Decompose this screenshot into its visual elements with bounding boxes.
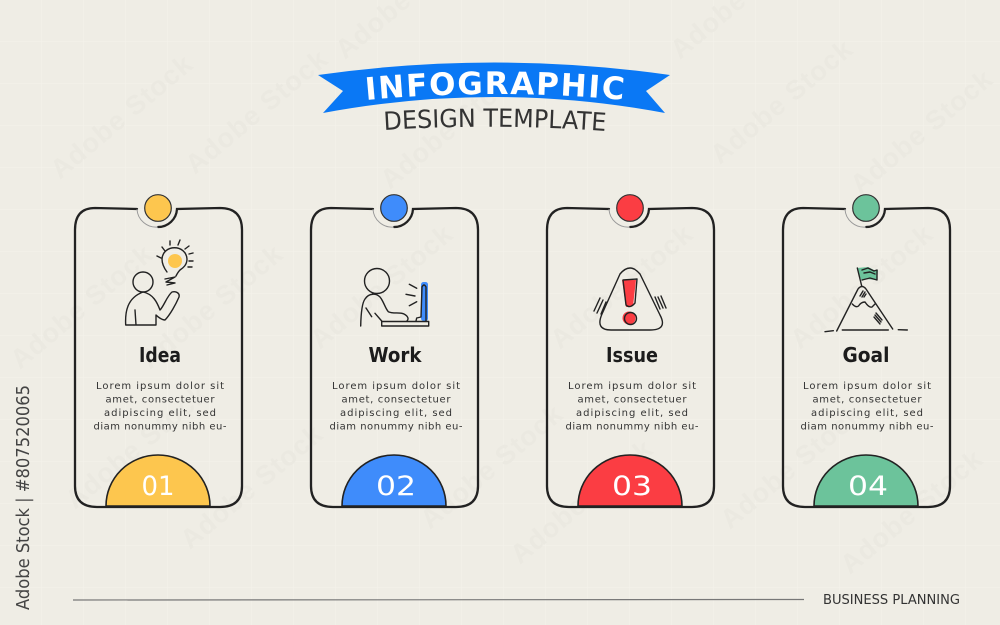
number tab: 01: [142, 471, 174, 502]
panel: Idea: [75, 195, 242, 507]
description: [566, 381, 699, 432]
watermark pattern: Adobe Stock: [180, 43, 334, 180]
description: [330, 381, 463, 432]
description: amet, consectetuer: [812, 394, 922, 406]
description: adipiscing elit, sed: [104, 408, 216, 419]
watermark pattern: Adobe Stock: [5, 238, 159, 375]
description: diam nonummy nibh eu-: [800, 422, 934, 432]
watermark pattern: Adobe Stock: [45, 48, 199, 185]
watermark pattern: Adobe Stock: [785, 218, 939, 355]
number tab: [106, 455, 210, 506]
description: Lorem ipsum dolor sit: [568, 381, 696, 392]
footer label: BUSINESS PLANNING: [823, 593, 960, 608]
panel: Work: [311, 195, 478, 507]
heading: Issue: [606, 343, 658, 367]
watermark pattern: Adobe Stock: [415, 398, 569, 535]
footer rule: [73, 598, 804, 601]
marker dot: [617, 195, 643, 221]
heading: Work: [368, 343, 422, 367]
watermark pattern: Adobe Stock: [505, 433, 659, 570]
card frame: [783, 208, 950, 507]
number tab: [342, 455, 446, 506]
card frame: [311, 208, 478, 507]
watermark pattern: Adobe Stock: [60, 378, 214, 515]
watermark pattern: Adobe Stock: [375, 58, 529, 195]
description: Lorem ipsum dolor sit: [332, 381, 460, 392]
watermark pattern: Adobe Stock: [835, 443, 989, 580]
heading: Goal: [842, 343, 890, 367]
description: amet, consectetuer: [578, 394, 687, 406]
description: Lorem ipsum dolor sit: [803, 381, 931, 392]
watermark pattern: Adobe Stock: [135, 238, 289, 375]
description: amet, consectetuer: [342, 394, 451, 406]
ribbon: [318, 62, 670, 113]
watermark pattern: Adobe Stock: [845, 63, 999, 200]
panel: Issue: [547, 195, 714, 507]
icon: warning triangle: [594, 268, 666, 330]
subtitle: DESIGN TEMPLATE: DESIGN TEMPLATE: [385, 108, 606, 131]
title banner: [318, 62, 670, 131]
card frame: [547, 208, 714, 507]
stock credit: Adobe Stock | #807520065: [13, 385, 34, 610]
description: [800, 381, 934, 432]
description: [94, 381, 227, 432]
number tab: 02: [376, 471, 416, 502]
title: INFOGRAPHIC: INFOGRAPHIC: [366, 71, 624, 100]
number tab: 03: [612, 471, 652, 502]
description: adipiscing elit, sed: [576, 408, 688, 419]
number tab: [578, 455, 682, 506]
panel: Goal: [783, 195, 950, 507]
card frame: [75, 208, 242, 507]
description: diam nonummy nibh eu-: [94, 422, 227, 432]
icon: mountain with flag: [825, 267, 907, 332]
icon: person at computer: [361, 268, 429, 326]
marker dot: [145, 195, 171, 221]
watermark pattern: Adobe Stock: [175, 418, 329, 555]
description: adipiscing elit, sed: [340, 408, 452, 419]
number tab: [814, 455, 918, 506]
description: adipiscing elit, sed: [811, 408, 923, 419]
icon: person with light bulb: [126, 240, 193, 325]
description: diam nonummy nibh eu-: [566, 422, 699, 432]
watermark pattern: Adobe Stock: [715, 398, 869, 535]
watermark pattern: Adobe Stock: [305, 218, 459, 355]
watermark pattern: Adobe Stock: [705, 33, 859, 170]
description: Lorem ipsum dolor sit: [96, 381, 224, 392]
marker dot: [853, 195, 879, 221]
watermark pattern: Adobe Stock: [545, 218, 699, 355]
heading: Idea: [139, 343, 181, 367]
description: amet, consectetuer: [106, 394, 215, 406]
number tab: 04: [848, 471, 888, 502]
marker dot: [381, 195, 407, 221]
description: diam nonummy nibh eu-: [330, 422, 463, 432]
